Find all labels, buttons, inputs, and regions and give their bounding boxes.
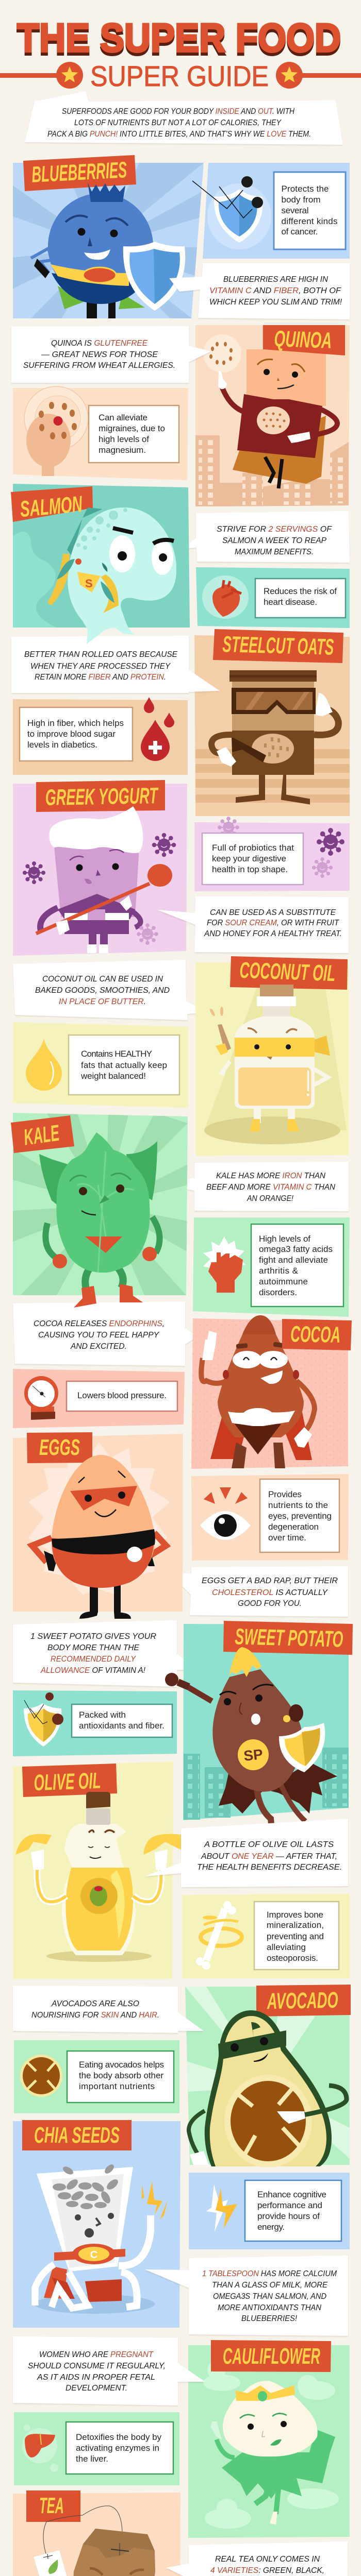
icon: gauge [24,1376,58,1420]
speech bubble: chia: MORE ANTIOXIDANTS THAN [218,2303,321,2312]
speech bubble: coconut oil: IN PLACE OF BUTTER. [59,997,146,1006]
speech bubble: eggs: CHOLESTEROL IS ACTUALLY [212,1588,328,1597]
speech bubble: yogurt: AND HONEY FOR A HEALTHY TREAT. [204,929,342,938]
panel: chia seeds character [13,2120,180,2328]
speech bubble: cauliflower: WOMEN WHO ARE PREGNANT [39,2350,154,2359]
speech bubble: cocoa [13,1301,198,1366]
speech bubble: blueberries: VITAMIN C AND FIBER, BOTH OF [209,286,341,295]
speech bubble: salmon: SALMON A WEEK TO REAP [222,536,326,545]
speech bubble: avocado: NOURISHING FOR SKIN AND HAIR. [31,2011,159,2020]
speech bubble: yogurt [157,896,349,953]
speech bubble: tea: 4 VARIETIES: GREEN, BLACK, [210,2566,324,2575]
info box: Improves bone [267,1910,323,1920]
speech bubble: chia: OMEGA3S THAN SALMON, AND [213,2292,326,2301]
label: kale [11,1115,74,1153]
info box [255,579,346,618]
panel: eggs character [13,1432,183,1619]
icon: head with seeds [24,386,88,476]
panel: blueberries benefit [192,163,350,259]
info box: Protects the [282,184,329,194]
character: salmon hero: S [85,577,93,590]
panel: coconut oil character [195,956,349,1156]
label: blueberries [23,155,136,191]
info box: body from [282,195,321,205]
speech bubble: quinoa: SUFFERING FROM WHEAT ALLERGIES. [23,361,175,370]
label: avocado [256,1985,351,2016]
speech bubble: steelcut oats [11,636,220,693]
character: salmon hero [47,507,176,644]
character: cauliflower hero [210,2381,335,2524]
info box: activating enzymes in [76,2443,159,2453]
icon: lightning [206,2184,237,2232]
info box: over time. [268,1533,306,1543]
intro speech bubble: LOTS OF NUTRIENTS BUT NOT A LOT OF CALORIES, THEY [74,118,282,127]
label: cauliflower [211,2340,331,2372]
icon: heart [202,575,249,619]
speech bubble: chia: THAN A GLASS OF MILK, MORE [212,2281,327,2290]
panel: yogurt benefit [194,817,350,891]
info box: several [282,206,308,215]
character: sweet potato hero: SP [243,1746,264,1764]
panel: greek yogurt character [13,780,187,956]
icon: avocado pit [20,2055,62,2097]
panel: salmon benefit [196,567,350,628]
icon: blood drops [141,697,174,761]
panel: blood pressure benefit [13,1369,185,1428]
info box: autoimmune [259,1277,308,1286]
info box [67,2051,174,2103]
speech bubble: cauliflower: SHOULD CONSUME IT REGULARLY, [28,2362,166,2370]
info box: eyes, preventing [268,1511,332,1521]
character: sweet potato hero [165,1647,337,1829]
info box: omega3 fatty acids [259,1244,333,1254]
character: coconut oil bottle [209,985,330,1131]
panel: blueberries character [13,155,204,318]
info box: heart disease. [264,597,317,607]
speech bubble: cocoa: CAUSING YOU TO FEEL HAPPY [38,1331,159,1340]
speech bubble: sweet potato [13,1620,198,1687]
speech bubble: cauliflower: DEVELOPMENT. [65,2384,127,2393]
speech bubble: eggs: EGGS GET A BAD RAP, BUT THEIR [202,1577,338,1585]
speech bubble: salmon [182,511,350,563]
speech bubble: sweet potato: ALLOWANCE OF VITAMIN A! [40,1666,146,1675]
info box [254,1902,339,1970]
info box: Eating avocados helps [79,2060,164,2070]
label: blueberries: BLUEBERRIES [31,157,127,188]
speech bubble: quinoa [11,326,211,383]
subtitle with stars [0,60,361,92]
info box [245,2180,341,2241]
label: tea [26,2490,80,2522]
speech bubble: tea [166,2541,348,2576]
info box [66,2422,173,2474]
speech bubble: sweet potato: RECOMMENDED DAILY [51,1655,136,1664]
panel: oats benefit [13,697,188,775]
info box: High in fiber, which helps [27,718,124,728]
info box: keep your digestive [212,854,286,863]
info box: alleviating [267,1942,306,1952]
speech bubble: chia: 1 TABLESPOON HAS MORE CALCIUM [202,2269,337,2278]
info box: energy. [257,2222,285,2232]
speech bubble: coconut oil [13,960,207,1020]
panel: quinoa character [195,325,350,506]
label: salmon: SALMON [19,492,84,522]
info box: Reduces the risk of [264,586,337,596]
panel: eggs benefit [191,1474,349,1561]
speech bubble: olive oil [145,1819,348,1887]
label: kale: KALE [22,1120,61,1150]
speech bubble: quinoa: — GREAT NEWS FOR THOSE [41,350,158,359]
info box: levels in diabetics. [27,740,97,750]
info box: High levels of [259,1234,310,1244]
intro speech bubble: PACK A BIG PUNCH! INTO LITTLE BITES, AND THAT’S WHY WE LOVE THEM. [47,130,311,139]
info box: the liver. [76,2454,108,2464]
icon: probiotics group [218,817,344,878]
panel: avocado benefit [14,2040,179,2113]
speech bubble: cauliflower: AS IT AIDS IN PROPER FETAL [37,2373,155,2382]
speech bubble: olive oil: THE HEALTH BENEFITS DECREASE. [197,1863,342,1872]
info box [251,1224,343,1307]
info box: Lowers blood pressure. [77,1391,167,1400]
character: blueberry hero [31,182,185,318]
subtitle with stars: SUPER GUIDE [90,60,269,92]
info box: to improve blood sugar [27,729,116,739]
info box: Packed with [79,1710,126,1720]
speech bubble: eggs: GOOD FOR YOU. [238,1599,302,1608]
panel: olive oil benefit [182,1894,350,1978]
info box: fight and alleviate [259,1255,328,1265]
info box [67,1381,177,1411]
panel: tea character [13,2490,180,2576]
speech bubble: olive oil: A BOTTLE OF OLIVE OIL LASTS [204,1840,334,1849]
panel: avocado character [185,1985,351,2167]
speech bubble: coconut oil: COCONUT OIL CAN BE USED IN [42,975,163,984]
speech bubble: coconut oil: BAKED GOODS, SMOOTHIES, AND [35,986,170,995]
character: cocoa hero [201,1315,315,1468]
intro speech bubble [25,91,343,145]
panel: sweet potato benefit [13,1690,177,1756]
panel: steelcut oats character [194,629,350,816]
speech bubble: blueberries [169,263,350,319]
speech bubble: steelcut oats: RETAIN MORE FIBER AND PROTEIN. [35,673,166,682]
intro speech bubble: SUPERFOODS ARE GOOD FOR YOUR BODY INSIDE AND OUT. WITH [62,107,294,116]
panel: salmon character [11,484,190,644]
info box: important nutrients [79,2081,155,2091]
speech bubble: sweet potato: BODY MORE THAN THE [47,1643,139,1652]
character: egg hero [32,1455,166,1619]
info box [89,405,179,463]
speech bubble: blueberries: WHICH KEEP YOU SLIM AND TRIM! [209,298,342,307]
icon: shield with bugs [192,176,271,249]
info box: Provides [268,1489,302,1499]
icon: probiotics [23,833,176,884]
speech bubble: kale: KALE HAS MORE IRON THAN [216,1172,325,1180]
icon: oil drop [26,1039,62,1091]
panel: cauliflower character [188,2340,350,2538]
character: kale hero [39,1132,160,1308]
panel: olive oil character [13,1761,186,1979]
label: greek yogurt: GREEK YOGURT [45,783,159,810]
info box: mineralization, [267,1920,324,1930]
character: chia glass hero: C [90,2249,97,2261]
panel: chia seeds benefit [189,2173,350,2249]
icon: bone [196,1901,242,1970]
speech bubble: cocoa: COCOA RELEASES ENDORPHINS, [34,1319,165,1328]
label: olive oil [22,1764,117,1797]
character: tea bag hero [34,2506,155,2576]
panel: coconut oil benefit [13,1022,188,1108]
info box: fats that actually keep [81,1060,167,1070]
info box [202,833,303,885]
speech bubble: avocado [13,1986,204,2033]
character: oats hero [211,670,338,803]
info box: high levels of [99,434,149,444]
character: chia glass hero [34,2163,168,2314]
panel: kale benefit [193,1217,350,1317]
character: olive oil bottle [15,1792,186,1962]
info box: Can alleviate [99,413,147,422]
speech bubble: chia: BLUEBERRIES! [241,2314,298,2323]
info box: migraines, due to [99,423,165,433]
speech bubble: olive oil: ABOUT ONE YEAR — AFTER THAT, [201,1852,337,1861]
icon: light probiotic [137,923,158,945]
info box: antioxidants and fiber. [79,1721,165,1731]
label: salmon [11,486,93,522]
info box [69,1035,179,1095]
speech bubble: blueberries: BLUEBERRIES ARE HIGH IN [223,275,328,284]
info box: magnesium. [99,445,146,455]
info box: Detoxifies the body by [76,2432,162,2442]
speech bubble: steelcut oats: WHEN THEY ARE PROCESSED THEY [30,662,171,671]
panel: liver benefit [14,2412,179,2485]
speech bubble: cocoa: AND EXCITED. [70,1342,127,1351]
info box: Full of probiotics that [212,843,294,853]
label: chia seeds [22,2120,132,2150]
speech bubble: cauliflower [13,2336,205,2405]
speech bubble: chia [145,2256,348,2336]
label: eggs [27,1432,92,1463]
character: avocado hero [189,2010,347,2167]
info box: degeneration [268,1522,319,1532]
speech bubble: salmon: STRIVE FOR 2 SERVINGS OF [217,525,332,534]
info box: osteoporosis. [267,1953,318,1963]
label: quinoa [263,325,345,355]
icon: golden shield [24,1692,63,1747]
panel: cocoa character [191,1315,352,1469]
speech bubble: quinoa: QUINOA IS GLUTENFREE [51,339,147,348]
info box [72,1704,172,1737]
icon: eye [200,1487,251,1540]
info box: of cancer. [282,227,318,236]
speech bubble: tea: REAL TEA ONLY COMES IN [215,2555,320,2564]
speech bubble: salmon: MAXIMUM BENEFITS. [235,548,314,556]
speech bubble: yogurt: FOR SOUR CREAM, OR WITH FRUIT [207,919,339,927]
label: greek yogurt [36,780,165,812]
info box: health in top shape. [212,865,288,874]
info box: provide hours of [257,2211,320,2221]
info box: Enhance cognitive [257,2190,326,2199]
label: cocoa [282,1319,352,1350]
info box: weight balanced! [80,1071,146,1081]
speech bubble: sweet potato: 1 SWEET POTATO GIVES YOUR [30,1632,156,1641]
info box: Contains HEALTHY [81,1049,152,1059]
panel: sweet potato character [165,1621,353,1829]
info box: the body absorb other [79,2071,163,2080]
label: eggs: EGGS [39,1435,80,1460]
panel: kale character [11,1113,188,1308]
speech bubble: kale: BEEF AND MORE VITAMIN C THAN [206,1183,335,1192]
character: quinoa hero [203,334,337,488]
label: chia seeds: CHIA SEEDS [34,2123,120,2148]
label: tea: TEA [39,2493,64,2518]
info box: disorders. [259,1287,297,1297]
speech bubble: kale: AN ORANGE! [247,1194,293,1203]
icon: liver [22,2425,58,2472]
info box [20,707,133,761]
info box: arthritis & [259,1266,299,1276]
label: olive oil: OLIVE OIL [34,1768,101,1795]
speech bubble: avocado: AVOCADOS ARE ALSO [51,1999,139,2008]
info box: different kinds [282,216,337,226]
speech bubble: steelcut oats: BETTER THAN ROLLED OATS BECAUSE [24,650,177,659]
info box [260,1479,339,1552]
info box: nutrients to the [268,1500,328,1510]
speech bubble: kale [161,1162,349,1211]
speech bubble: eggs [170,1566,348,1617]
info box: performance and [257,2200,322,2210]
speech bubble: yogurt: CAN BE USED AS A SUBSTITUTE [210,908,336,917]
character: yogurt hero [36,806,172,953]
info box [274,172,346,249]
info box: preventing and [267,1931,324,1941]
panel: quinoa benefit [13,386,188,480]
icon: fist [203,1236,245,1293]
